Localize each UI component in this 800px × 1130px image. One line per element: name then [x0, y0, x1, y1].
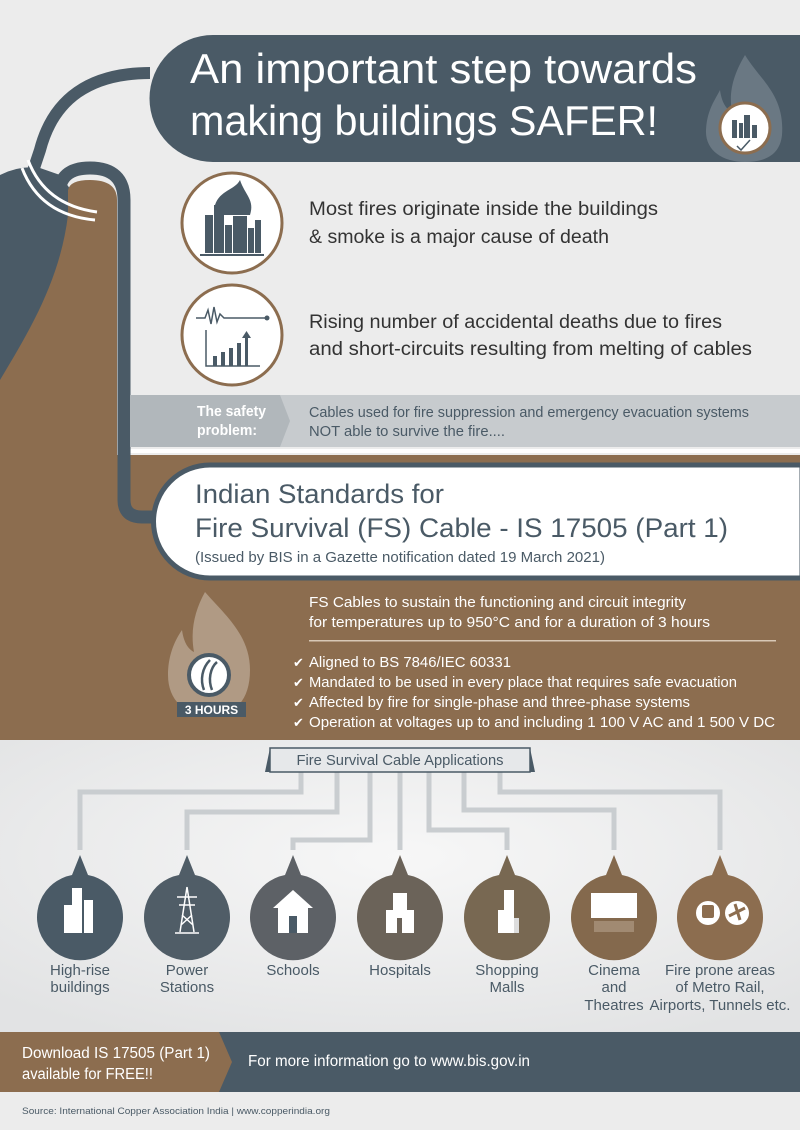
- app: cinema: Cinema: [588, 962, 641, 979]
- text: fires inside buildings: & smoke is a major cause of death: [309, 227, 609, 248]
- app: high-rise: buildings: [50, 979, 110, 996]
- icon: flame with clock 3 hours: [168, 592, 250, 717]
- bullet list: Aligned to BS 7846/IEC 60331: [309, 654, 511, 671]
- app: shopping malls: Shopping: [475, 962, 539, 979]
- text: fires inside buildings: Most fires originate inside the buildings: [309, 199, 658, 220]
- safety problem bar: Cables used for fire suppression and emergency evacuation systems: [309, 405, 749, 421]
- text: fires inside buildings: [309, 199, 658, 248]
- bullet list: ✔: [293, 695, 304, 710]
- app: metro airports: Airports, Tunnels etc.: [650, 997, 790, 1014]
- app: high-rise: [37, 855, 123, 996]
- safety problem bar: problem:: [197, 423, 257, 439]
- title banner: An important step towards: [190, 45, 697, 92]
- title banner: [150, 35, 800, 162]
- safety problem bar: NOT able to survive the fire....: [309, 424, 505, 440]
- title banner: making buildings SAFER!: [190, 97, 658, 144]
- text: rising deaths: and short-circuits resulting from melting of cables: [309, 339, 752, 360]
- bottom bar: [0, 1032, 800, 1092]
- applications tab: [265, 748, 535, 772]
- standards white pill: Fire Survival (FS) Cable - IS 17505 (Part 1): [195, 513, 728, 543]
- icon: flame with clock 3 hours: 3 HOURS: [185, 703, 238, 717]
- applications tab: Fire Survival Cable Applications: [296, 753, 504, 769]
- bullet list: ✔: [293, 675, 304, 690]
- text: FS cables description: [309, 594, 776, 642]
- app: schools: Schools: [266, 962, 320, 979]
- app: power stations: [144, 855, 230, 996]
- text: rising deaths: Rising number of accidental deaths due to fires: [309, 312, 722, 333]
- icon: flame with building check: [706, 55, 782, 162]
- standards white pill: Indian Standards for: [195, 479, 444, 509]
- app: schools: [250, 855, 336, 979]
- app: shopping malls: Malls: [489, 979, 525, 996]
- bullet list: Operation at voltages up to and including 1 100 V AC and 1 500 V DC: [309, 714, 775, 731]
- app: cinema: Theatres: [584, 997, 644, 1014]
- text: rising deaths: [309, 312, 752, 360]
- text: FS cables description: for temperatures up to 950°C and for a duration of 3 hours: [309, 614, 710, 631]
- safety problem bar: The safety: [197, 404, 266, 420]
- app: metro airports: Fire prone areas: [665, 962, 775, 979]
- source: Source: International Copper Association India | www.copperindia.org: [22, 1106, 330, 1117]
- standards white pill: [154, 465, 800, 578]
- app: cinema: [571, 855, 657, 1014]
- bottom bar: For more information go to www.bis.gov.in: [248, 1053, 530, 1070]
- app: metro airports: [650, 855, 790, 1014]
- app: power stations: Stations: [160, 979, 214, 996]
- bottom bar: Download IS 17505 (Part 1): [22, 1045, 210, 1062]
- bullet list: [293, 654, 775, 731]
- icon: rising chart circle: [182, 285, 282, 385]
- bottom bar: available for FREE!!: [22, 1066, 153, 1083]
- app: cinema: and: [601, 979, 627, 996]
- app: high-rise: High-rise: [50, 962, 110, 979]
- standards white pill: (Issued by BIS in a Gazette notification dated 19 March 2021): [195, 549, 605, 566]
- left sleeve and cable decoration: [0, 73, 152, 517]
- app: hospitals: [357, 855, 443, 979]
- text: FS cables description: FS Cables to sustain the functioning and circuit integrity: [309, 594, 686, 611]
- app: metro airports: of Metro Rail,: [675, 979, 765, 996]
- connector lines: [80, 772, 720, 850]
- app: hospitals: Hospitals: [369, 962, 431, 979]
- brown band: [0, 455, 800, 740]
- safety problem bar: [130, 395, 800, 447]
- bullet list: Affected by fire for single-phase and three-phase systems: [309, 694, 690, 711]
- bullet list: ✔: [293, 715, 304, 730]
- bullet list: ✔: [293, 655, 304, 670]
- bullet list: Mandated to be used in every place that requires safe evacuation: [309, 674, 737, 691]
- icon: burning buildings circle: [182, 173, 282, 273]
- app: shopping malls: [464, 855, 550, 996]
- app: power stations: Power: [166, 962, 208, 979]
- applications background: [0, 740, 800, 1032]
